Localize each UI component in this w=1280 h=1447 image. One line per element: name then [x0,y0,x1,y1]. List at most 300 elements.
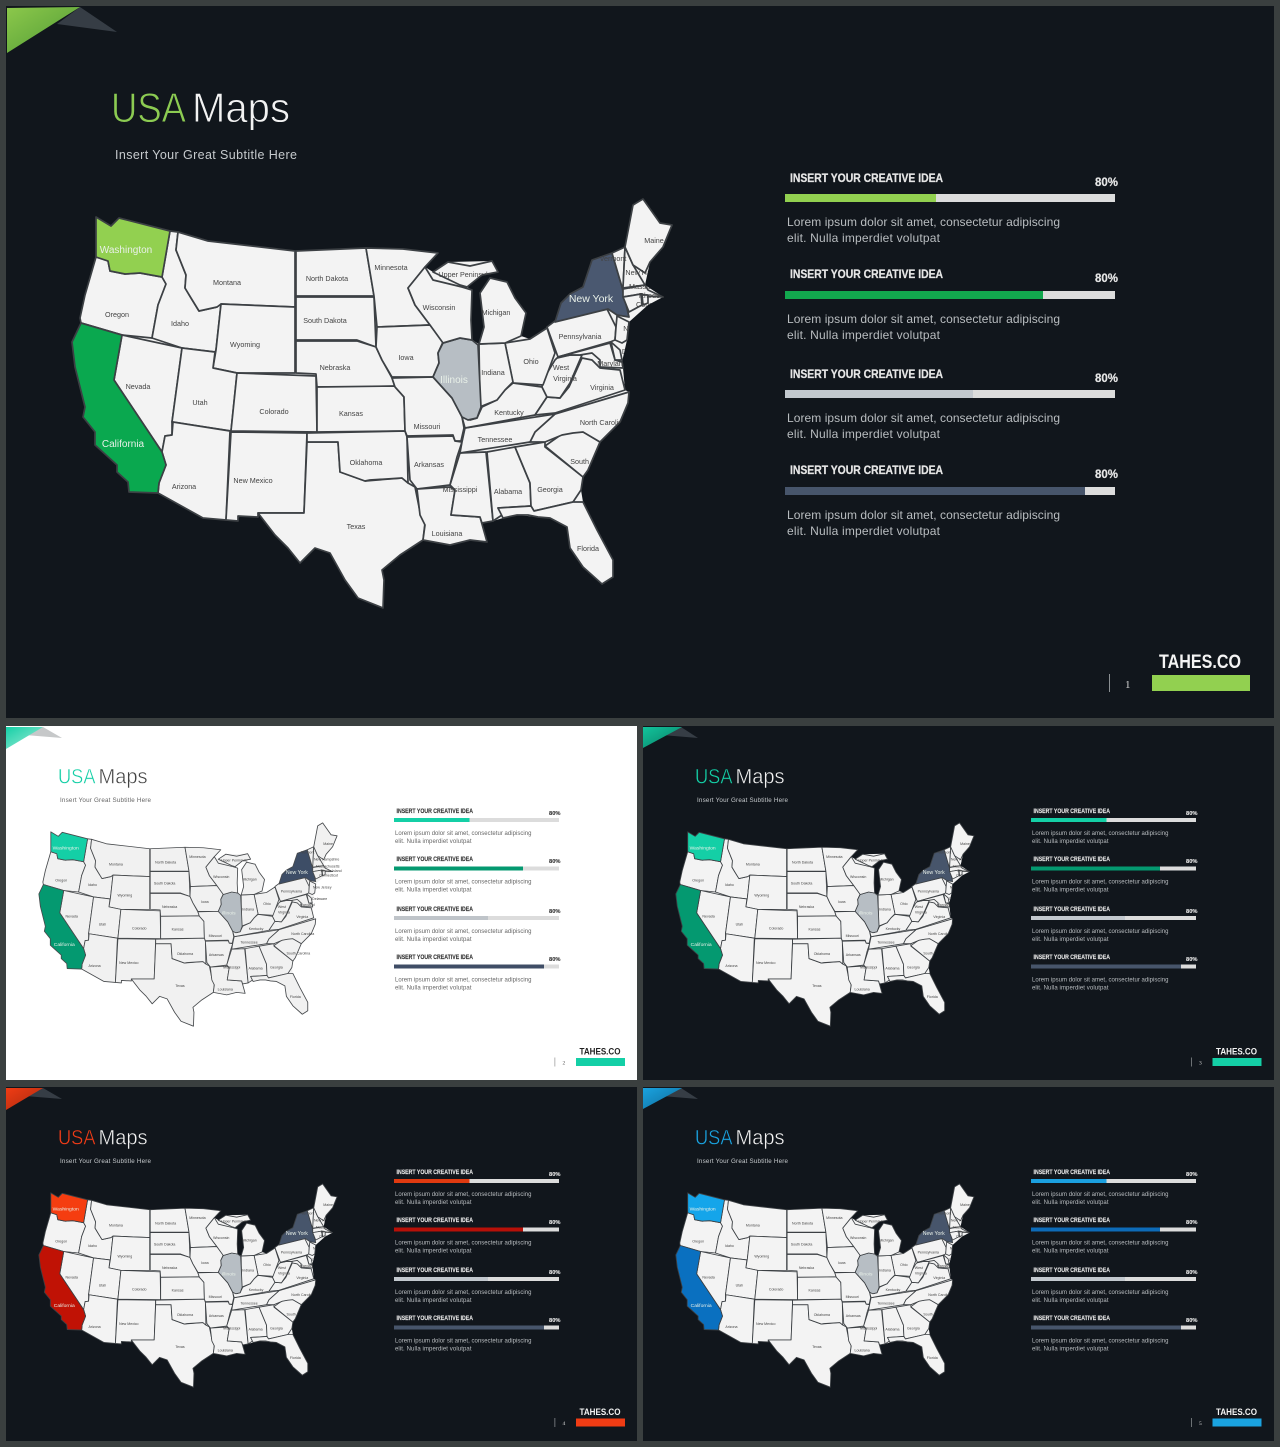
state labels: Montana [109,1224,123,1228]
state labels: Virginia [278,1271,290,1275]
state labels: Utah [99,922,106,926]
state labels: Washington [690,846,716,852]
progress rows: Lorem ipsum dolor sit amet, consectetur adipiscing [395,1240,532,1246]
state labels [690,842,979,999]
state labels: California [54,1303,75,1309]
state labels: Rhode Island [321,1230,342,1234]
state labels: Maryland [300,1264,315,1268]
state labels: Rhode Island [639,291,681,300]
state labels: New York [923,870,945,876]
progress rows [1031,809,1198,992]
state labels: Florida [927,1356,938,1360]
state labels: Ohio [900,1263,908,1267]
footer: brand and page number [1191,1046,1262,1066]
state labels: Texas [175,984,185,988]
state labels: Utah [736,1283,743,1287]
state labels: North Carolina [928,932,951,936]
state labels: Connecticut [956,874,975,878]
progress rows: elit. Nulla imperdiet volutpat [1032,1346,1109,1352]
corner ribbon [7,7,117,53]
state labels: New Hampshire [314,1219,339,1223]
state labels: Arizona [725,1325,737,1329]
state labels: Mississippi [223,966,241,970]
progress rows: elit. Nulla imperdiet volutpat [1032,1248,1109,1254]
state labels: Kentucky [886,927,901,931]
progress rows: 80% [549,859,560,865]
title and subtitle: USA [695,1126,732,1150]
USA map [39,823,342,1026]
state labels: Florida [290,1356,301,1360]
title and subtitle [695,766,789,804]
corner ribbon [643,1088,698,1109]
state labels: Iowa [838,1261,846,1265]
progress rows: INSERT YOUR CREATIVE IDEA [1034,1268,1111,1274]
state labels: North Carolina [580,418,626,427]
state labels: Maryland [937,903,952,907]
state labels: Idaho [88,1244,97,1248]
state labels: Pennsylvania [918,889,939,893]
footer: brand and page number: 2 [562,1060,566,1066]
state labels: Nevada [702,1275,715,1279]
state labels: Wyoming [117,1254,132,1258]
state labels: Virginia [296,915,308,919]
title and subtitle: USA [695,766,732,788]
state labels: Maine [644,236,664,245]
state labels: Oregon [105,310,129,319]
state labels: Georgia [270,966,283,970]
state labels: Massachusetts [953,865,977,869]
progress rows: elit. Nulla imperdiet volutpat [395,1248,472,1254]
title: USA [111,84,186,131]
state labels: Upper Peninsula [438,270,492,279]
state labels: North Dakota [306,274,348,283]
progress rows: 80% [1186,1220,1198,1226]
title and subtitle: USA [58,1126,96,1150]
progress rows: 80% [1186,909,1198,915]
footer: brand and page number: 5 [1199,1421,1202,1427]
USA map [676,1184,979,1387]
state labels: Georgia [907,1327,920,1331]
state labels: New Hampshire [951,1219,976,1223]
row 2: elit. Nulla imperdiet volutpat [787,328,941,342]
state labels: Ohio [263,902,271,906]
state labels: Michigan [879,1239,894,1243]
state labels: Wisconsin [423,303,455,312]
progress rows: elit. Nulla imperdiet volutpat [395,839,472,845]
state labels: Maryland [937,1264,952,1268]
state labels: South Dakota [791,1243,812,1247]
state labels: Pennsylvania [281,1250,302,1254]
state labels: Nevada [702,914,715,918]
title and subtitle: Maps [98,1126,148,1150]
progress rows: INSERT YOUR CREATIVE IDEA [1034,1170,1111,1176]
row 1: Lorem ipsum dolor sit amet, consectetur adipiscing [787,215,1060,229]
state labels: Arkansas [414,460,444,469]
progress rows: Lorem ipsum dolor sit amet, consectetur adipiscing [395,880,532,886]
state labels: Alabama [885,967,900,971]
state labels: Kansas [339,409,363,418]
progress rows: Lorem ipsum dolor sit amet, consectetur adipiscing [1032,1338,1168,1344]
state labels: Vermont [938,1212,951,1216]
state labels: Minnesota [189,1216,206,1220]
state labels [53,1203,342,1360]
state labels: Delaware [312,1258,327,1262]
progress rows: Lorem ipsum dolor sit amet, consectetur adipiscing [1032,929,1168,935]
state labels: Ohio [263,1263,271,1267]
state labels: Mississippi [860,966,877,970]
title and subtitle: USA [58,766,96,788]
footer: brand and page number [1109,652,1250,692]
state labels: Tennessee [240,1302,258,1306]
state labels: Nebraska [162,905,177,909]
USA map [39,1184,342,1387]
title and subtitle: Maps [736,766,784,788]
row 2: 80% [1095,273,1118,285]
progress rows: INSERT YOUR CREATIVE IDEA [396,809,474,815]
state labels: Illinois [859,910,873,916]
row 3: Lorem ipsum dolor sit amet, consectetur adipiscing [787,411,1060,425]
state labels: Minnesota [826,855,843,859]
progress rows: Lorem ipsum dolor sit amet, consectetur adipiscing [1032,1240,1168,1246]
state labels: Michigan [242,878,257,882]
state labels: Indiana [481,368,505,377]
state labels: Montana [746,863,760,867]
USA map [72,199,681,608]
progress rows: elit. Nulla imperdiet volutpat [1032,839,1109,845]
state labels: Colorado [132,1288,147,1292]
state labels: Kentucky [886,1288,901,1292]
progress rows: elit. Nulla imperdiet volutpat [395,1298,472,1304]
state labels: Maryland [300,903,315,907]
state labels: West [278,905,286,909]
state labels: Arkansas [846,1314,861,1318]
state labels: Maryland [597,359,627,368]
state labels: Oklahoma [177,952,193,956]
row 1: INSERT YOUR CREATIVE IDEA [790,171,943,185]
state labels: Arizona [172,482,196,491]
footer: brand and page number: TAHES.CO [580,1407,620,1418]
state labels: Nevada [66,914,78,918]
state labels: Delaware [949,1258,964,1262]
progress rows: 80% [1186,811,1198,817]
state labels: Vermont [301,1212,314,1216]
state labels: Delaware [312,897,327,901]
state labels: Florida [290,995,301,999]
state labels: Illinois [440,375,468,386]
state labels: California [102,439,145,450]
state labels: New Jersey [313,886,332,890]
state labels: Oklahoma [177,1313,193,1317]
state labels: New Mexico [233,476,273,485]
footer: brand and page number: TAHES.CO [1159,652,1241,673]
state labels: Wisconsin [213,875,229,879]
state labels: Virginia [278,910,290,914]
title and subtitle [58,766,152,804]
state labels: Nevada [126,382,150,391]
progress rows: 80% [549,957,560,963]
state labels: Alabama [885,1328,900,1332]
title [111,84,290,131]
state labels: Wyoming [754,893,769,897]
state labels: Alabama [249,967,263,971]
row 3 [785,367,1118,441]
state labels: California [54,942,75,948]
state labels: Tennessee [877,1302,895,1306]
state labels: Georgia [537,485,563,494]
progress rows: INSERT YOUR CREATIVE IDEA [1034,857,1111,863]
progress rows: 80% [1186,1318,1198,1324]
progress rows: Lorem ipsum dolor sit amet, consectetur adipiscing [1032,1192,1168,1198]
state labels: Idaho [171,319,189,328]
title and subtitle: Maps [736,1126,784,1150]
state labels: Connecticut [319,874,338,878]
state labels: New Jersey [623,324,661,333]
title and subtitle: Insert Your Great Subtitle Here [697,1158,789,1165]
state labels: New Jersey [950,886,969,890]
progress rows: 80% [549,1220,560,1226]
state labels: New Hampshire [625,268,677,277]
state labels: Pennsylvania [918,1250,939,1254]
progress rows: 80% [1186,859,1198,865]
state labels: Michigan [879,878,894,882]
progress rows [394,1170,560,1352]
state labels: New Mexico [119,1322,139,1326]
state labels: Illinois [859,1271,873,1277]
progress rows: INSERT YOUR CREATIVE IDEA [396,907,474,913]
progress rows: elit. Nulla imperdiet volutpat [395,888,472,894]
state labels: Iowa [838,900,846,904]
state labels: New Mexico [119,961,139,965]
state labels: Mississippi [860,1327,877,1331]
state labels: South Dakota [154,882,175,886]
state labels: Massachusetts [953,1226,977,1230]
state labels: Utah [192,398,208,407]
state labels: Oregon [55,1240,67,1244]
state labels: Louisiana [218,987,233,991]
state labels: Ohio [523,357,539,366]
row 3: 80% [1095,373,1118,385]
state labels: Upper Peninsula [221,859,247,863]
state labels: Pennsylvania [281,889,302,893]
state labels: Kansas [172,928,184,932]
state labels: Arizona [89,964,101,968]
state labels: New Jersey [313,1247,332,1251]
progress rows: Lorem ipsum dolor sit amet, consectetur adipiscing [1032,831,1168,837]
state labels: Maine [323,1203,333,1207]
state labels: Virginia [296,1276,308,1280]
state labels: Washington [690,1207,716,1213]
state labels: West [915,905,923,909]
state labels: Iowa [201,1261,209,1265]
progress rows: elit. Nulla imperdiet volutpat [1032,986,1109,992]
state labels [690,1203,979,1360]
state labels: Missouri [414,422,441,431]
title and subtitle: Insert Your Great Subtitle Here [60,797,152,804]
state labels: New Jersey [950,1247,969,1251]
row 4: INSERT YOUR CREATIVE IDEA [790,463,943,477]
state labels: Georgia [270,1327,283,1331]
progress rows: 80% [1186,957,1198,963]
progress rows: Lorem ipsum dolor sit amet, consectetur adipiscing [395,978,532,984]
title: Maps [192,84,290,131]
state labels: Tennessee [240,941,258,945]
state labels: West [553,363,569,372]
progress rows: INSERT YOUR CREATIVE IDEA [1034,1218,1111,1224]
state labels: Nebraska [799,1266,814,1270]
row 4: Lorem ipsum dolor sit amet, consectetur adipiscing [787,508,1060,522]
state labels: Wyoming [754,1254,769,1258]
footer: brand and page number: TAHES.CO [580,1046,620,1058]
state labels: Oklahoma [350,458,382,467]
progress rows: elit. Nulla imperdiet volutpat [395,1346,472,1352]
progress rows: 80% [549,1172,560,1178]
state labels: Utah [99,1283,106,1287]
panel: white slide 2 [6,726,637,1080]
state labels: Virginia [553,374,577,383]
state labels: Delaware [622,347,652,356]
state labels: North Dakota [155,861,176,865]
state labels: South Dakota [154,1243,175,1247]
state labels: Pennsylvania [559,332,601,341]
state labels: Colorado [259,407,289,416]
progress rows: INSERT YOUR CREATIVE IDEA [1034,955,1111,961]
progress rows: INSERT YOUR CREATIVE IDEA [1034,1316,1111,1322]
state labels: Nebraska [320,363,350,372]
state labels: Montana [746,1224,760,1228]
state labels: New Hampshire [951,858,976,862]
progress rows: 80% [549,909,560,915]
state labels: Kansas [172,1289,184,1293]
state labels: South Carolina [923,952,947,956]
footer: brand and page number: TAHES.CO [1216,1046,1257,1058]
progress rows: 80% [549,1318,560,1324]
panel: dark slide 3 teal [643,726,1274,1080]
footer: brand and page number: 4 [562,1421,566,1427]
state labels: Massachusetts [316,865,340,869]
state labels: Rhode Island [958,1230,979,1234]
state labels: Iowa [201,900,209,904]
state labels: Kansas [809,928,821,932]
row 1: elit. Nulla imperdiet volutpat [787,231,941,245]
row 3: INSERT YOUR CREATIVE IDEA [790,367,943,381]
state labels: Colorado [769,1288,783,1292]
row 3: elit. Nulla imperdiet volutpat [787,427,941,441]
state labels: South Carolina [570,457,618,466]
state labels: Virginia [933,915,945,919]
state labels: Illinois [222,1271,236,1277]
progress rows: Lorem ipsum dolor sit amet, consectetur adipiscing [395,1338,532,1344]
progress rows: elit. Nulla imperdiet volutpat [1032,937,1109,943]
state labels: Connecticut [636,300,674,309]
state labels: North Dakota [155,1222,176,1226]
state labels: West [278,1266,286,1270]
state labels: Montana [109,863,123,867]
progress rows: 80% [1186,1270,1198,1276]
state labels: Delaware [949,897,964,901]
state labels: Massachusetts [316,1226,340,1230]
state labels: Rhode Island [958,869,979,873]
state labels: North Carolina [291,1293,314,1297]
state labels: Tennessee [478,435,512,444]
state labels: South Dakota [303,316,347,325]
state labels: South Carolina [287,952,310,956]
progress rows: 80% [549,1270,560,1276]
footer: brand and page number: 1 [1125,679,1130,691]
state labels: Texas [812,1345,822,1349]
progress rows [785,171,1118,538]
state labels: New York [286,1231,308,1237]
state labels: Indiana [242,1268,254,1272]
panel: dark slide 4 red [6,1087,637,1441]
state labels: California [691,942,712,948]
state labels: Florida [927,995,938,999]
state labels: New Mexico [756,961,775,965]
progress rows: elit. Nulla imperdiet volutpat [395,986,472,992]
title and subtitle: Insert Your Great Subtitle Here [697,797,789,804]
state labels [53,842,342,999]
row 2: INSERT YOUR CREATIVE IDEA [790,267,943,281]
progress rows: INSERT YOUR CREATIVE IDEA [396,1268,474,1274]
progress rows: INSERT YOUR CREATIVE IDEA [1034,809,1111,815]
row 4: 80% [1095,469,1118,481]
state labels: New Mexico [756,1322,775,1326]
progress rows: elit. Nulla imperdiet volutpat [395,937,472,943]
footer: brand and page number [1191,1407,1262,1427]
state labels: Missouri [209,1295,222,1299]
footer: brand and page number: TAHES.CO [1216,1407,1257,1418]
state labels: Louisiana [432,529,462,538]
state labels: Louisiana [218,1348,233,1352]
state labels: Wyoming [230,340,260,349]
corner ribbon [6,1088,62,1110]
state labels: Vermont [301,851,314,855]
state labels: North Carolina [291,932,314,936]
state labels: New York [569,293,614,305]
state labels: Idaho [725,1244,734,1248]
state labels: Mississippi [223,1327,241,1331]
state labels: Vermont [938,851,951,855]
state labels: Vermont [600,254,626,263]
state labels: Wyoming [117,893,132,897]
progress rows: INSERT YOUR CREATIVE IDEA [1034,907,1111,913]
state labels: Arkansas [846,953,861,957]
state labels: Massachusetts [629,282,677,291]
corner ribbon [643,727,698,748]
state labels: Arizona [89,1325,101,1329]
state labels: Alabama [249,1328,263,1332]
state labels: Arkansas [209,1314,224,1318]
progress rows: Lorem ipsum dolor sit amet, consectetur adipiscing [1032,880,1168,886]
state labels: Missouri [209,934,222,938]
state labels: Washington [53,846,79,852]
state labels: Texas [812,984,822,988]
title and subtitle: Maps [98,766,148,788]
state labels: Michigan [242,1239,257,1243]
state labels: Wisconsin [850,875,866,879]
footer: brand and page number [554,1046,625,1066]
title and subtitle: Insert Your Great Subtitle Here [60,1158,152,1165]
state labels: Idaho [88,883,97,887]
state labels [100,236,681,553]
state labels: Texas [347,522,366,531]
progress rows [1031,1170,1198,1352]
progress rows: INSERT YOUR CREATIVE IDEA [396,857,474,863]
state labels: North Dakota [792,861,813,865]
state labels: Missouri [846,934,859,938]
state labels: South Carolina [923,1313,947,1317]
row 1 [785,171,1118,245]
state labels: Montana [213,278,241,287]
